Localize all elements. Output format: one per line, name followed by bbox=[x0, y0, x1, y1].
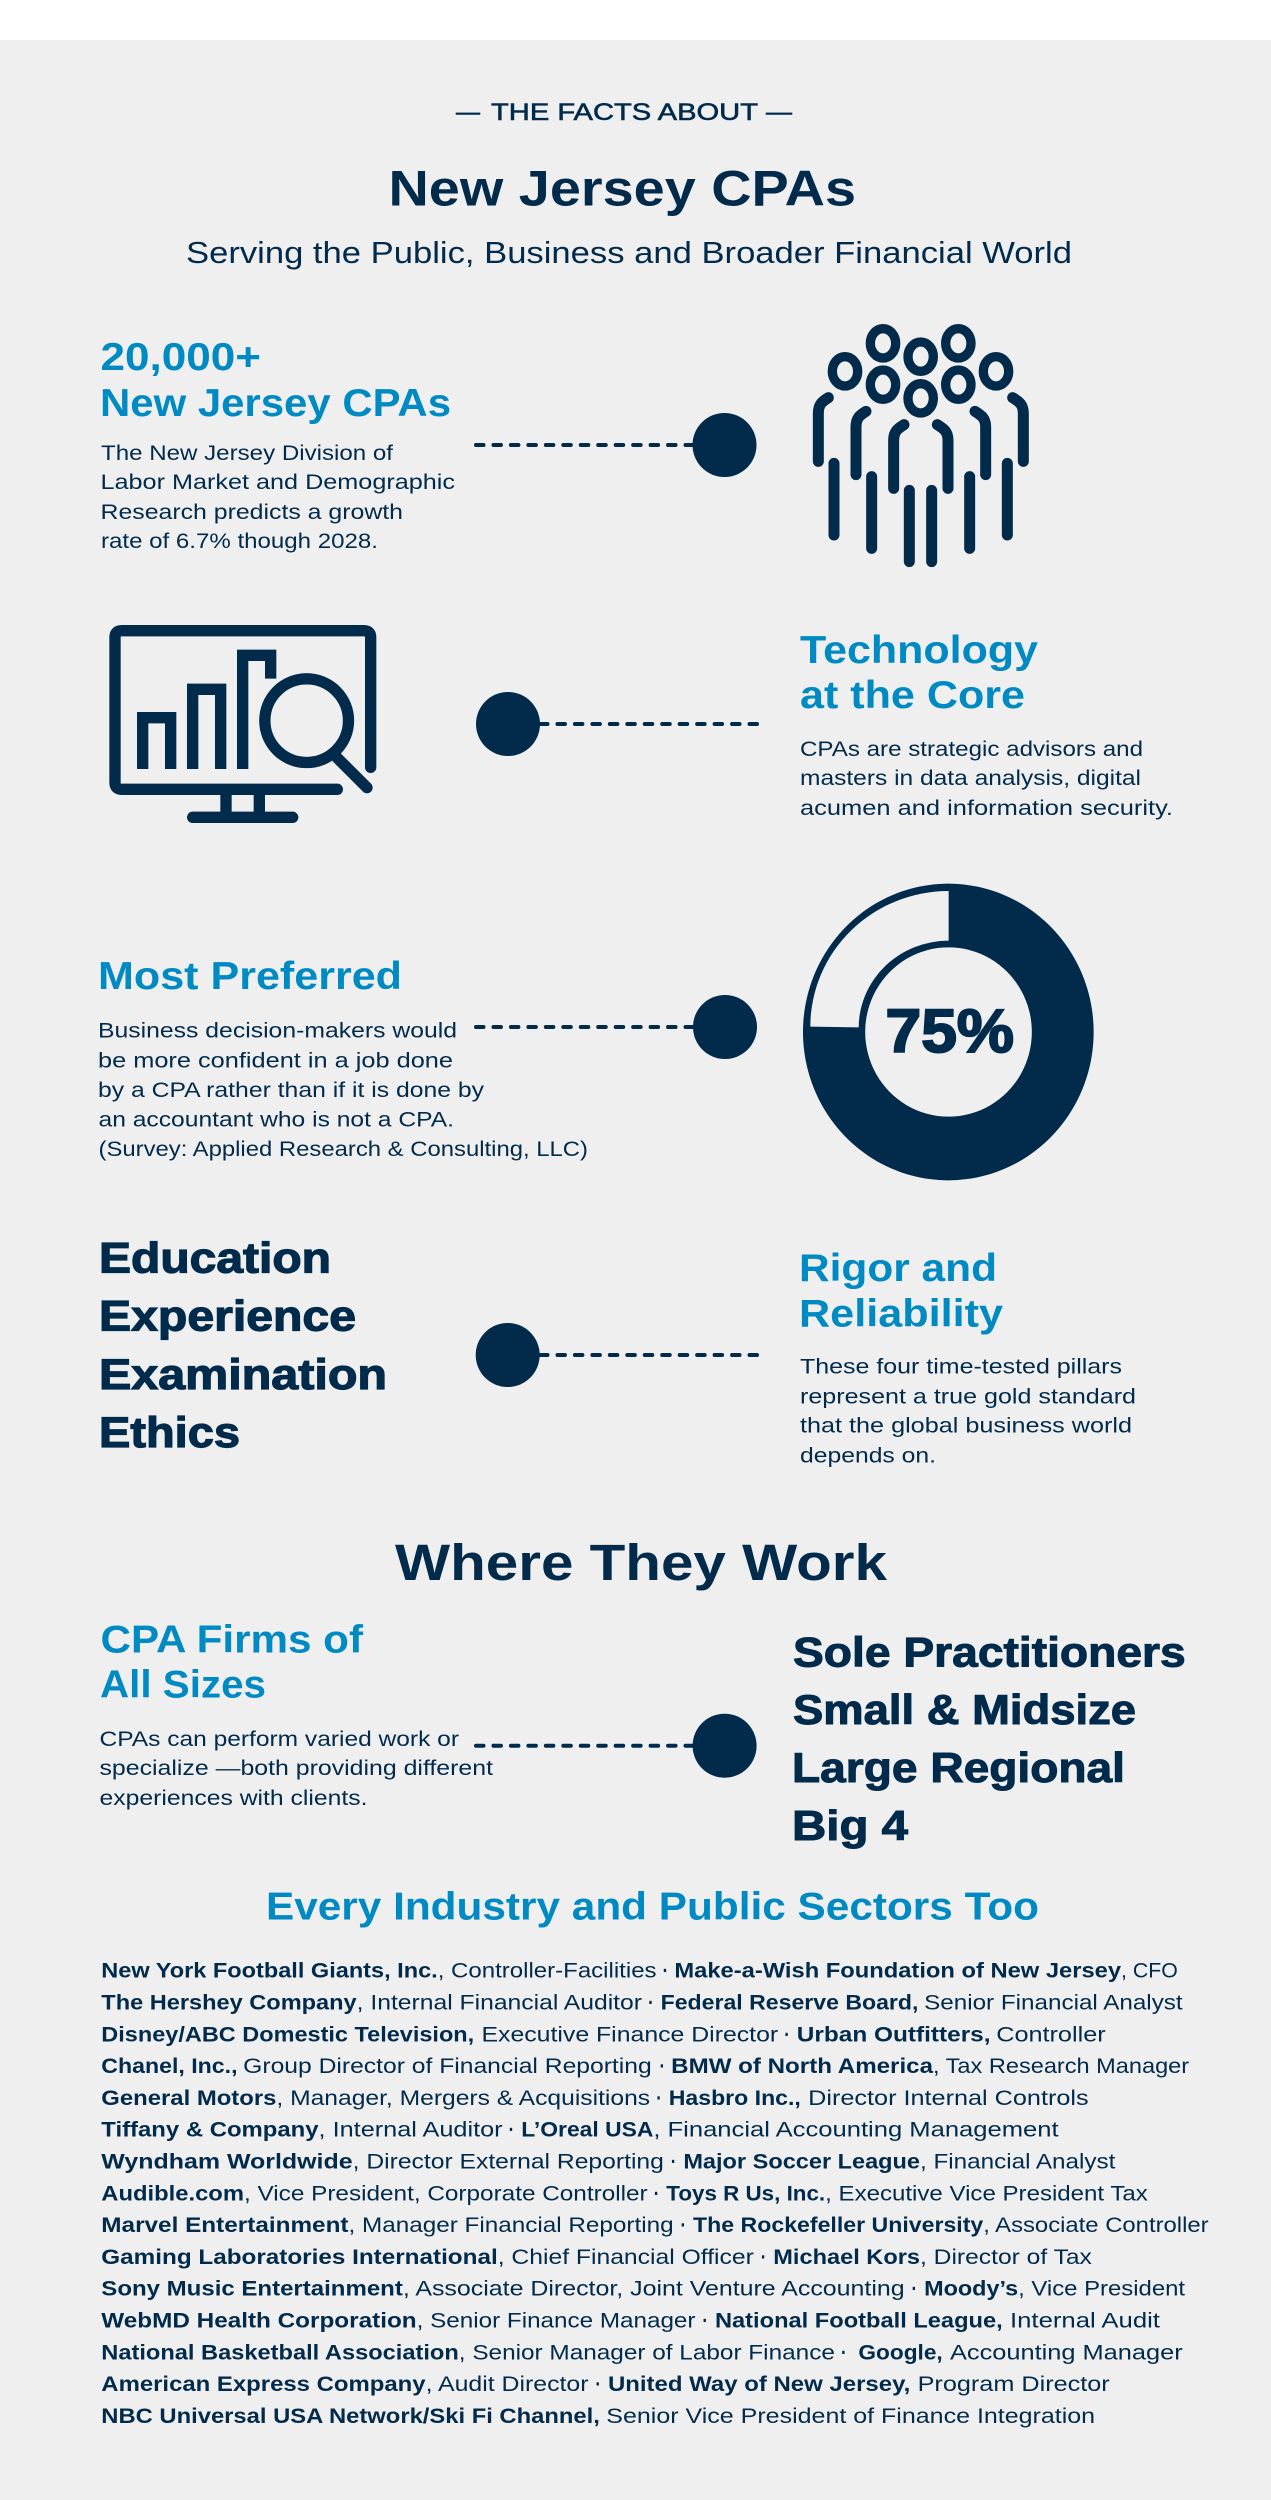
line 12: , Senior Finance Manager bbox=[417, 2310, 695, 2333]
line 3: · bbox=[784, 2024, 790, 2047]
line 6: Tiffany & Company bbox=[101, 2119, 319, 2142]
line 4: · bbox=[659, 2056, 665, 2079]
line 5: · bbox=[656, 2087, 662, 2110]
line 3: Executive Finance Director bbox=[481, 2024, 778, 2047]
text block: experiences with clients. bbox=[100, 1786, 368, 1810]
line 7: , Financial Analyst bbox=[920, 2151, 1116, 2174]
list: four pillars: Ethics bbox=[99, 1409, 240, 1457]
icon: group of people bbox=[818, 329, 1023, 562]
text block: by a CPA rather than if it is done by bbox=[98, 1078, 484, 1102]
line 10: , Chief Financial Officer bbox=[498, 2246, 754, 2269]
line 14: · bbox=[595, 2374, 601, 2397]
list: firm types bbox=[792, 1629, 1186, 1849]
line 2: The Hershey Company bbox=[101, 1992, 357, 2015]
line 14: , Audit Director bbox=[426, 2374, 588, 2397]
line 1: · bbox=[663, 1960, 668, 1983]
line 14 bbox=[101, 2374, 1110, 2397]
line 12: WebMD Health Corporation bbox=[101, 2310, 417, 2333]
heading bbox=[799, 1247, 1003, 1336]
panel: CPA firms of all sizes bbox=[100, 1619, 1186, 1849]
heading: Most Preferred bbox=[98, 955, 402, 998]
line 10: Gaming Laboratories International bbox=[101, 2246, 498, 2269]
line 3 bbox=[101, 2024, 1106, 2047]
line 9: , Manager Financial Reporting bbox=[349, 2215, 674, 2238]
panel: most preferred bbox=[98, 884, 1094, 1180]
line 14: American Express Company bbox=[101, 2374, 426, 2397]
line 5: General Motors bbox=[101, 2087, 276, 2110]
line 4: Group Director of Financial Reporting bbox=[243, 2056, 652, 2079]
line 8: Audible.com bbox=[101, 2183, 244, 2206]
heading: Rigor and bbox=[799, 1247, 997, 1290]
line 4: , Tax Research Manager bbox=[933, 2056, 1189, 2079]
line 6: , Internal Auditor bbox=[319, 2119, 503, 2142]
panel: rigor and reliability bbox=[99, 1235, 1136, 1468]
connector bbox=[476, 413, 756, 477]
eyebrow: the facts about bbox=[456, 99, 793, 126]
connector bbox=[476, 692, 757, 756]
line 3: Disney/ABC Domestic Television, bbox=[101, 2024, 474, 2047]
header bbox=[186, 99, 1072, 270]
list: firm types: Large Regional bbox=[792, 1744, 1125, 1791]
line 6: · bbox=[509, 2119, 514, 2142]
text block bbox=[100, 441, 455, 553]
list: four pillars: Experience bbox=[99, 1293, 356, 1341]
text block: represent a true gold standard bbox=[800, 1384, 1136, 1408]
line 11: , Vice President bbox=[1018, 2278, 1186, 2301]
heading: 20,000+ bbox=[100, 336, 261, 379]
line 3: Controller bbox=[996, 2024, 1106, 2047]
text block: masters in data analysis, digital bbox=[800, 766, 1141, 790]
line 2: Senior Financial Analyst bbox=[924, 1992, 1184, 2015]
line 9: , Associate Controller bbox=[983, 2215, 1209, 2238]
line 1: , Controller-Facilities bbox=[438, 1960, 657, 1983]
line 8: , Vice President, Corporate Controller bbox=[244, 2183, 648, 2206]
line 9: · bbox=[681, 2215, 686, 2238]
panel: 20,000+ New Jersey CPAs bbox=[100, 329, 1023, 562]
text block: specialize —both providing different bbox=[100, 1756, 493, 1780]
heading: Reliability bbox=[799, 1293, 1003, 1336]
list: firm types: Big 4 bbox=[792, 1802, 909, 1849]
chart: 75% donut bbox=[803, 884, 1094, 1180]
line 11 bbox=[101, 2278, 1186, 2301]
list: firm types: Small & Midsize bbox=[793, 1686, 1136, 1733]
text block bbox=[100, 1727, 493, 1810]
list: firm types: Sole Practitioners bbox=[793, 1629, 1186, 1676]
text block: acumen and information security. bbox=[800, 796, 1173, 820]
line 10 bbox=[101, 2246, 1093, 2269]
icon: monitor with chart and magnifier bbox=[115, 631, 371, 817]
line 5: , Manager, Mergers & Acquisitions bbox=[276, 2087, 650, 2110]
text block: Labor Market and Demographic bbox=[100, 470, 455, 494]
text block: be more confident in a job done bbox=[98, 1048, 453, 1072]
line 9 bbox=[101, 2215, 1209, 2238]
line 1: New York Football Giants, Inc. bbox=[101, 1960, 438, 1983]
line 11: · bbox=[912, 2278, 917, 2301]
label: 75%: 75% bbox=[886, 997, 1014, 1065]
text block: (Survey: Applied Research & Consulting, LLC) bbox=[98, 1137, 588, 1161]
heading bbox=[100, 336, 451, 425]
line 7: Major Soccer League bbox=[683, 2151, 920, 2174]
line 6 bbox=[101, 2119, 1060, 2142]
line 14: Program Director bbox=[918, 2374, 1110, 2397]
line 13: National Basketball Association bbox=[101, 2342, 459, 2365]
heading: at the Core bbox=[800, 674, 1025, 717]
text block: CPAs are strategic advisors and bbox=[800, 737, 1143, 761]
connector bbox=[476, 995, 757, 1059]
list: four pillars: Examination bbox=[99, 1351, 387, 1399]
line 1 bbox=[101, 1960, 1178, 1983]
line 6: , Financial Accounting Management bbox=[653, 2119, 1060, 2142]
heading: CPA Firms of bbox=[100, 1619, 364, 1662]
line 7: , Director External Reporting bbox=[353, 2151, 664, 2174]
line 12: Internal Audit bbox=[1010, 2310, 1161, 2333]
line 4: BMW of North America bbox=[671, 2056, 934, 2079]
text block: Business decision-makers would bbox=[98, 1019, 457, 1043]
text block: The New Jersey Division of bbox=[101, 441, 393, 465]
text block: These four time-tested pillars bbox=[800, 1354, 1122, 1378]
line 14: United Way of New Jersey, bbox=[608, 2374, 910, 2397]
line 5 bbox=[101, 2087, 1089, 2110]
eyebrow: the facts about: — bbox=[456, 99, 480, 126]
title: New Jersey CPAs bbox=[388, 160, 856, 216]
line 13: Google, bbox=[858, 2342, 943, 2365]
line 11: Moody’s bbox=[924, 2278, 1018, 2301]
line 11: , Associate Director, Joint Venture Accounting bbox=[403, 2278, 905, 2301]
line 15 bbox=[101, 2405, 1095, 2428]
line 7: · bbox=[671, 2151, 676, 2174]
line 15: Senior Vice President of Finance Integration bbox=[606, 2405, 1095, 2428]
line 9: Marvel Entertainment bbox=[101, 2215, 349, 2238]
text block bbox=[98, 1019, 588, 1161]
line 10: , Director of Tax bbox=[920, 2246, 1093, 2269]
subtitle: Serving the Public, Business and Broader Financial World bbox=[186, 235, 1072, 270]
line 8 bbox=[101, 2183, 1148, 2206]
text block: an accountant who is not a CPA. bbox=[98, 1108, 454, 1132]
connector bbox=[476, 1323, 757, 1387]
heading bbox=[100, 1619, 364, 1707]
line 13: · bbox=[841, 2342, 847, 2365]
line 1: , CFO bbox=[1121, 1960, 1178, 1983]
heading bbox=[800, 629, 1038, 717]
line 12: National Football League, bbox=[715, 2310, 1003, 2333]
heading: every industry and public sectors too: Every Industry and Public Sectors Too bbox=[266, 1886, 1039, 1929]
heading: Technology bbox=[800, 629, 1038, 672]
text block: depends on. bbox=[800, 1444, 936, 1468]
line 13: Accounting Manager bbox=[950, 2342, 1183, 2365]
line 15: NBC Universal USA Network/Ski Fi Channel, bbox=[101, 2405, 600, 2428]
line 7: Wyndham Worldwide bbox=[101, 2151, 353, 2174]
line 7 bbox=[101, 2151, 1116, 2174]
line 2: , Internal Financial Auditor bbox=[357, 1992, 642, 2015]
line 10: · bbox=[761, 2246, 766, 2269]
heading: New Jersey CPAs bbox=[100, 382, 451, 425]
connector bbox=[476, 1714, 757, 1778]
eyebrow: the facts about: — bbox=[766, 99, 793, 126]
line 8: Toys R Us, Inc. bbox=[666, 2183, 825, 2206]
line 12 bbox=[101, 2310, 1161, 2333]
line 4 bbox=[101, 2056, 1189, 2079]
line 5: Director Internal Controls bbox=[808, 2087, 1089, 2110]
heading: All Sizes bbox=[100, 1664, 266, 1707]
text block: CPAs can perform varied work or bbox=[100, 1727, 459, 1751]
text block: rate of 6.7% though 2028. bbox=[101, 529, 378, 553]
line 9: The Rockefeller University bbox=[693, 2215, 984, 2238]
eyebrow: the facts about: THE FACTS ABOUT bbox=[491, 99, 758, 126]
line 5: Hasbro Inc., bbox=[669, 2087, 801, 2110]
line 8: , Executive Vice President Tax bbox=[825, 2183, 1148, 2206]
list: four pillars: Education bbox=[99, 1235, 331, 1283]
line 2: Federal Reserve Board, bbox=[661, 1992, 918, 2015]
line 10: Michael Kors bbox=[773, 2246, 920, 2269]
text block bbox=[800, 1354, 1136, 1468]
list: four pillars bbox=[99, 1235, 387, 1457]
line 11: Sony Music Entertainment bbox=[101, 2278, 404, 2301]
line 1: Make-a-Wish Foundation of New Jersey bbox=[674, 1960, 1122, 1983]
line 12: · bbox=[702, 2310, 708, 2333]
text block: Research predicts a growth bbox=[100, 500, 403, 524]
line 3: Urban Outfitters, bbox=[797, 2024, 991, 2047]
line 2: · bbox=[648, 1992, 654, 2015]
text block: employers and job titles bbox=[101, 1960, 1209, 2428]
line 2 bbox=[101, 1992, 1184, 2015]
line 8: · bbox=[654, 2183, 659, 2206]
line 13: , Senior Manager of Labor Finance bbox=[459, 2342, 835, 2365]
heading: where they work: Where They Work bbox=[395, 1534, 888, 1591]
panel: technology at the core bbox=[115, 629, 1173, 820]
line 4: Chanel, Inc., bbox=[101, 2056, 238, 2079]
text block: that the global business world bbox=[800, 1414, 1132, 1438]
text block bbox=[800, 737, 1173, 820]
line 13 bbox=[101, 2342, 1183, 2365]
line 6: L’Oreal USA bbox=[521, 2119, 654, 2142]
